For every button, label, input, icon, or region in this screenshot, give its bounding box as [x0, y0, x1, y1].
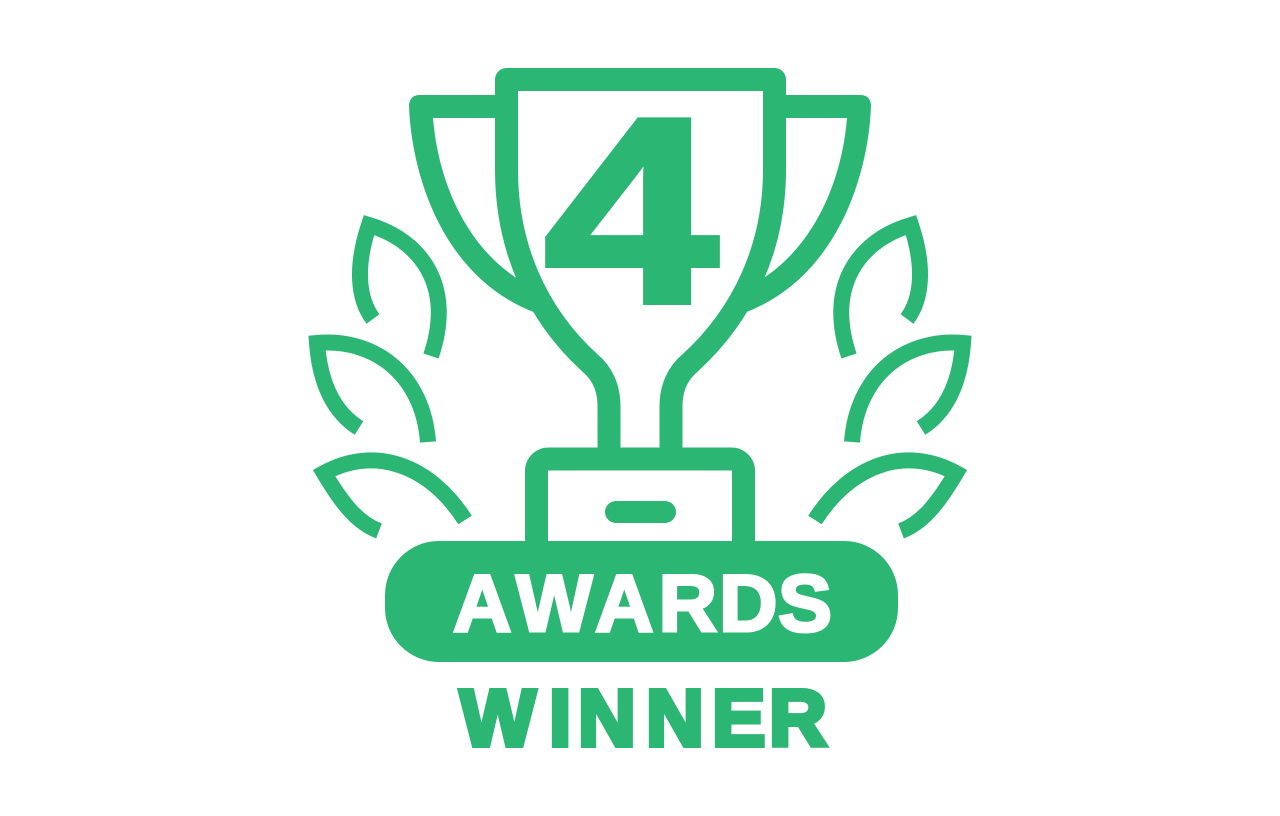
awards banner: [385, 541, 898, 662]
plinth slot: [605, 501, 676, 523]
leaf: right top: [841, 225, 920, 356]
leaf: left middle: [317, 343, 428, 442]
trophy: [409, 63, 871, 550]
number 4: 4: [544, 63, 720, 358]
winner text: WINNER: [460, 674, 827, 762]
leaf: left top: [360, 225, 439, 356]
trophy left handle: [409, 95, 536, 313]
left laurel leaves: [317, 225, 465, 531]
leaf: left bottom: [324, 460, 465, 531]
trophy right handle: [744, 95, 871, 313]
right laurel leaves: [815, 225, 963, 531]
trophy base plinth: [536, 459, 744, 550]
trophy cup and stem: [506, 80, 774, 460]
banner pill: [385, 541, 898, 662]
banner text: AWARDS: [453, 559, 832, 649]
leaf: right bottom: [815, 460, 956, 531]
leaf: right middle: [852, 343, 963, 442]
